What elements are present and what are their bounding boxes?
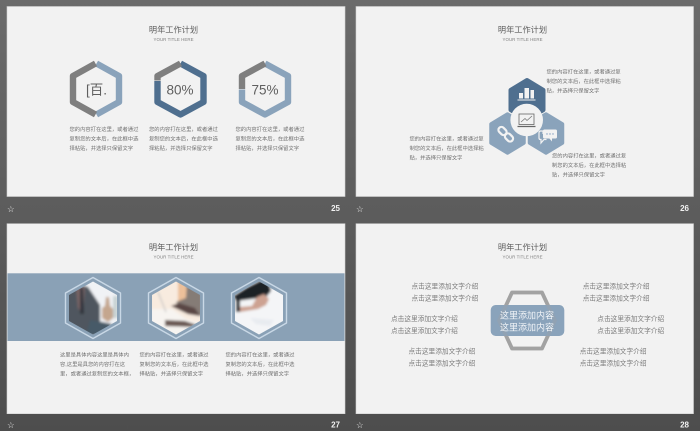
panel: slide 26 — [356, 6, 694, 196]
labels left: 点击这里添加文字介绍 — [412, 293, 479, 302]
labels right: 点击这里添加文字介绍 — [580, 346, 647, 356]
text block 3: 择粘贴，并选择只保留文字 — [226, 370, 289, 378]
labels right: 点击这里添加文字介绍 — [583, 281, 650, 290]
subtitle: YOUR TITLE HERE — [502, 254, 543, 260]
title: 明年工作计划 — [149, 242, 198, 252]
labels left — [391, 281, 479, 368]
text block 1 — [60, 350, 134, 378]
panel: slide 25 — [7, 6, 345, 196]
labels left: 点击这里添加文字介绍 — [408, 346, 476, 356]
hexagon: bars — [510, 80, 544, 120]
photo hexagon 2 — [148, 278, 204, 338]
labels left: 点击这里添加文字介绍 — [391, 326, 458, 335]
text block 1: 您的内容打在这里，或者通过 — [70, 125, 139, 133]
text block top right: 制您的文本后，在此框中选择粘 — [546, 77, 621, 85]
text block left — [410, 134, 484, 162]
text block 2: 择粘贴，并选择只保留文字 — [149, 144, 213, 152]
text block 2: 复制您的文本后，在此框中选 — [140, 360, 209, 368]
footer icon 26: ☆ — [356, 205, 364, 215]
center box: 这里添加内容 — [500, 310, 554, 320]
center box: 这里添加内容 — [500, 322, 554, 332]
text block 3 — [236, 125, 305, 152]
page number 27: 27 — [331, 420, 341, 430]
subtitle: YOUR TITLE HERE — [154, 37, 194, 42]
page number 26: 26 — [680, 204, 690, 213]
text block 2: 复制您的文本后，在此框中选 — [149, 134, 219, 142]
labels left: 点击这里添加文字介绍 — [412, 281, 479, 290]
hexagon gauge 3: 75% — [251, 82, 279, 98]
text block 3: 择粘贴，并选择只保留文字 — [236, 144, 299, 152]
labels right: 点击这里添加文字介绍 — [583, 293, 650, 302]
page number 25: 25 — [331, 204, 341, 213]
text block 3 — [226, 350, 295, 378]
title: 明年工作计划 — [498, 242, 547, 252]
text block 2: 您的内容打在这里，或者通过 — [140, 350, 209, 358]
text block bottom right — [552, 152, 627, 178]
text block 3: 复制您的文本后，在此框中选 — [226, 360, 295, 368]
text block 3: 复制您的文本后，在此框中选 — [236, 134, 305, 142]
hexagon gauge 3 — [242, 64, 288, 114]
icon: laptop chart — [518, 114, 536, 126]
hexagon outline — [499, 292, 555, 348]
footer icon 27: ☆ — [7, 421, 15, 431]
icon: chat bubbles — [539, 130, 557, 143]
hexagon: link — [491, 114, 524, 153]
footer icon 25: ☆ — [7, 205, 15, 215]
hexagon gauge 2: 80% — [166, 82, 194, 98]
text block 1: 复制您的文本后，在此框中选 — [70, 134, 139, 142]
text block left: 贴，并选择只保留文字 — [410, 154, 462, 162]
subtitle: YOUR TITLE HERE — [154, 254, 194, 260]
title: 明年工作计划 — [149, 24, 198, 34]
text block top right: 您的内容打在这里，或者通过复 — [546, 68, 621, 76]
text block 2 — [140, 350, 209, 378]
text block left: 制您的文本后，在此框中选择粘 — [410, 144, 484, 152]
center box — [491, 292, 564, 348]
text block left: 您的内容打在这里，或者通过复 — [410, 134, 484, 142]
photo band — [8, 273, 344, 341]
hexagon gauge 1: [百. — [86, 82, 107, 98]
text block 1 — [70, 125, 139, 152]
labels left: 点击这里添加文字介绍 — [408, 358, 476, 368]
photo hexagon 1 — [66, 278, 120, 338]
labels right — [580, 281, 664, 368]
icon: chain link — [497, 126, 514, 143]
labels right: 点击这里添加文字介绍 — [597, 326, 664, 335]
hexagon gauge 1 — [73, 64, 119, 114]
text block 1: 容,这里是具您的内容打在这 — [60, 360, 126, 368]
photo hexagon 3 — [232, 278, 287, 338]
labels left: 点击这里添加文字介绍 — [391, 314, 458, 323]
text block 2 — [149, 125, 219, 152]
center circle — [510, 104, 543, 136]
text block 1: 里，或者通过复制您的文本框， — [60, 370, 134, 378]
title: 明年工作计划 — [498, 24, 547, 34]
page number 28: 28 — [680, 420, 690, 430]
text block 2: 您的内容打在这里，或者通过 — [149, 125, 219, 133]
text block 1: 择粘贴，并选择只保留文字 — [70, 144, 133, 152]
text block top right — [546, 68, 621, 94]
text block top right: 贴，并选择只保留文字 — [546, 86, 599, 94]
text block 3: 您的内容打在这里，或者通过 — [226, 350, 295, 358]
panel: slide 27 — [7, 224, 345, 414]
subtitle: YOUR TITLE HERE — [502, 37, 543, 42]
text block bottom right: 制您的文本后，在此框中选择粘 — [552, 161, 627, 169]
text block bottom right: 您的内容打在这里，或者通过复 — [552, 152, 627, 160]
text block 1: 这里是具体内容这里是具体内 — [60, 350, 129, 358]
icon: bar chart — [518, 88, 536, 100]
labels right: 点击这里添加文字介绍 — [597, 314, 664, 323]
text block bottom right: 贴，并选择只保留文字 — [552, 170, 605, 178]
footer icon 28: ☆ — [356, 421, 364, 431]
panel: slide 28 — [356, 224, 694, 414]
labels right: 点击这里添加文字介绍 — [580, 358, 647, 368]
hexagon: chat — [530, 114, 562, 153]
hexagon gauge 2 — [158, 64, 204, 114]
text block 3: 您的内容打在这里，或者通过 — [236, 125, 305, 133]
text block 2: 择粘贴，并选择只保留文字 — [140, 370, 203, 378]
